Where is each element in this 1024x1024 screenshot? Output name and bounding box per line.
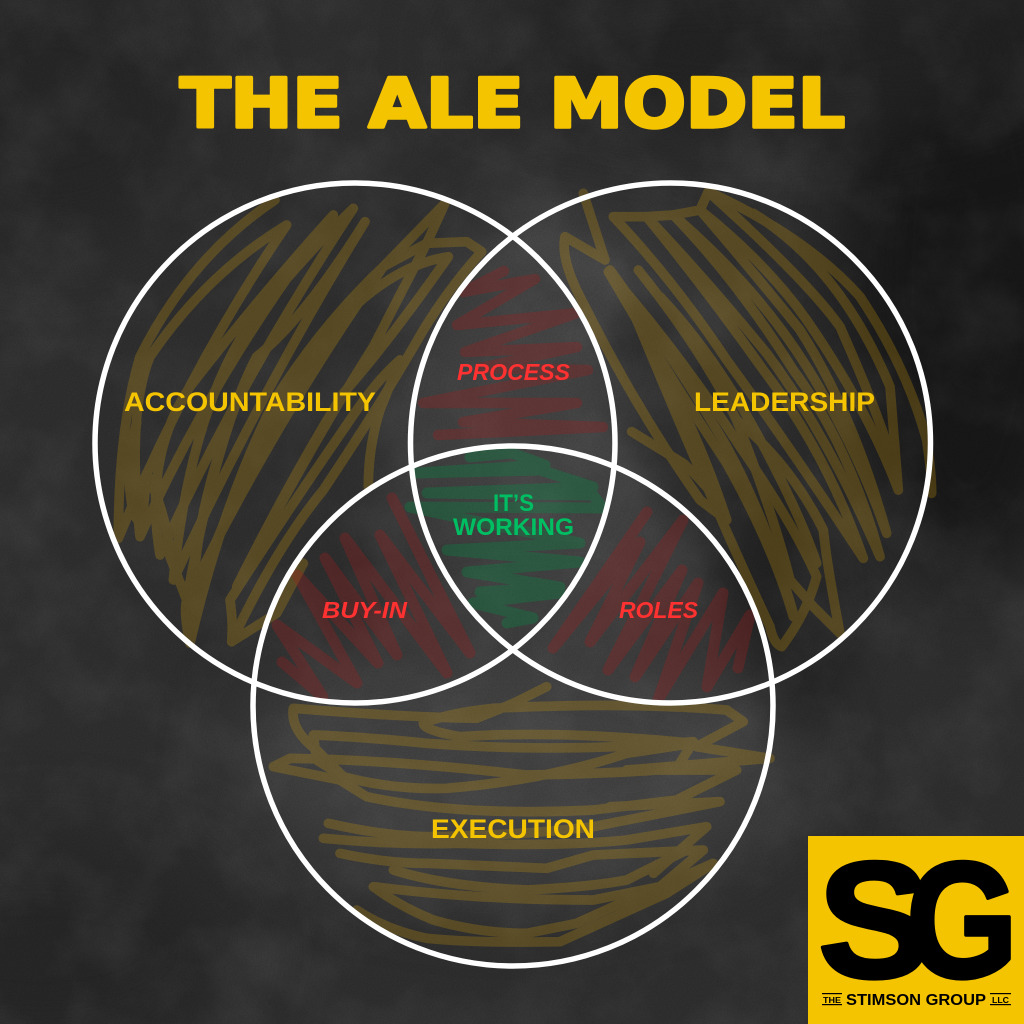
logo monogram: S [818, 828, 931, 1012]
label: process: PROCESS [457, 359, 571, 385]
venn circle: accountability [95, 183, 615, 703]
scribble: buy-in [277, 498, 470, 697]
logo tagline: THE [823, 996, 842, 1005]
logo monogram [818, 828, 1018, 1012]
logo: the stimson group [808, 828, 1024, 1024]
label: accountability: ACCOUNTABILITY [124, 387, 376, 417]
label: buy-in: BUY-IN [322, 597, 407, 623]
logo tagline: LLC [992, 996, 1009, 1005]
label: it's working: WORKING [453, 514, 574, 541]
scribble: accountability [118, 200, 482, 643]
scribble: it's working [410, 453, 603, 623]
scribble: leadership [564, 192, 932, 647]
venn circle: leadership [410, 183, 930, 703]
label: it's working: IT’S [493, 490, 534, 517]
scribble: execution [273, 687, 770, 942]
scribble: process [423, 271, 603, 435]
logo tagline: STIMSON GROUP [846, 992, 986, 1009]
venn circle: execution [253, 446, 773, 966]
label: it's working [453, 490, 574, 541]
label: leadership: LEADERSHIP [694, 387, 875, 417]
title: THE ALE MODEL [180, 65, 845, 144]
label: roles: ROLES [619, 597, 699, 623]
scribble: roles [553, 512, 750, 700]
label: execution: EXECUTION [431, 814, 595, 844]
